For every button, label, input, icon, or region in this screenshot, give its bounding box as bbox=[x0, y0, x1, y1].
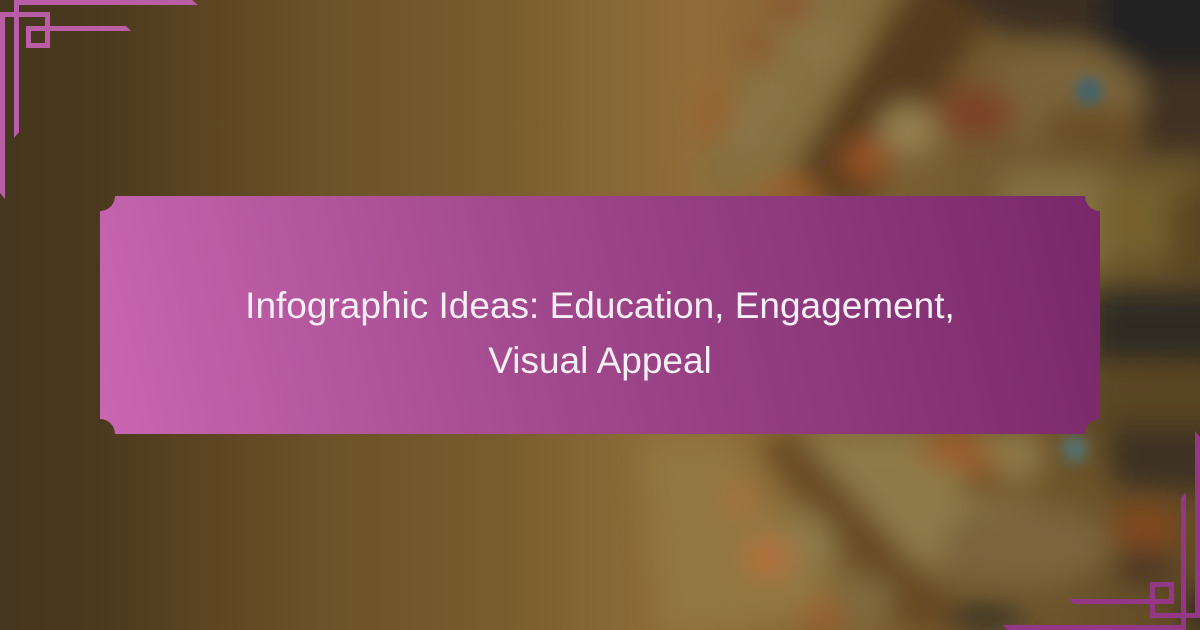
top right bbox=[690, 0, 890, 190]
corner ornament: top left bbox=[0, 0, 198, 199]
title: Visual Appeal bbox=[488, 340, 712, 380]
corner ornament: bottom right bbox=[1002, 431, 1200, 630]
title: Infographic Ideas: Education, Engagement, bbox=[245, 284, 955, 326]
title bbox=[245, 284, 955, 380]
title panel: notched banner bbox=[100, 196, 1100, 434]
bottom right bbox=[640, 440, 840, 630]
